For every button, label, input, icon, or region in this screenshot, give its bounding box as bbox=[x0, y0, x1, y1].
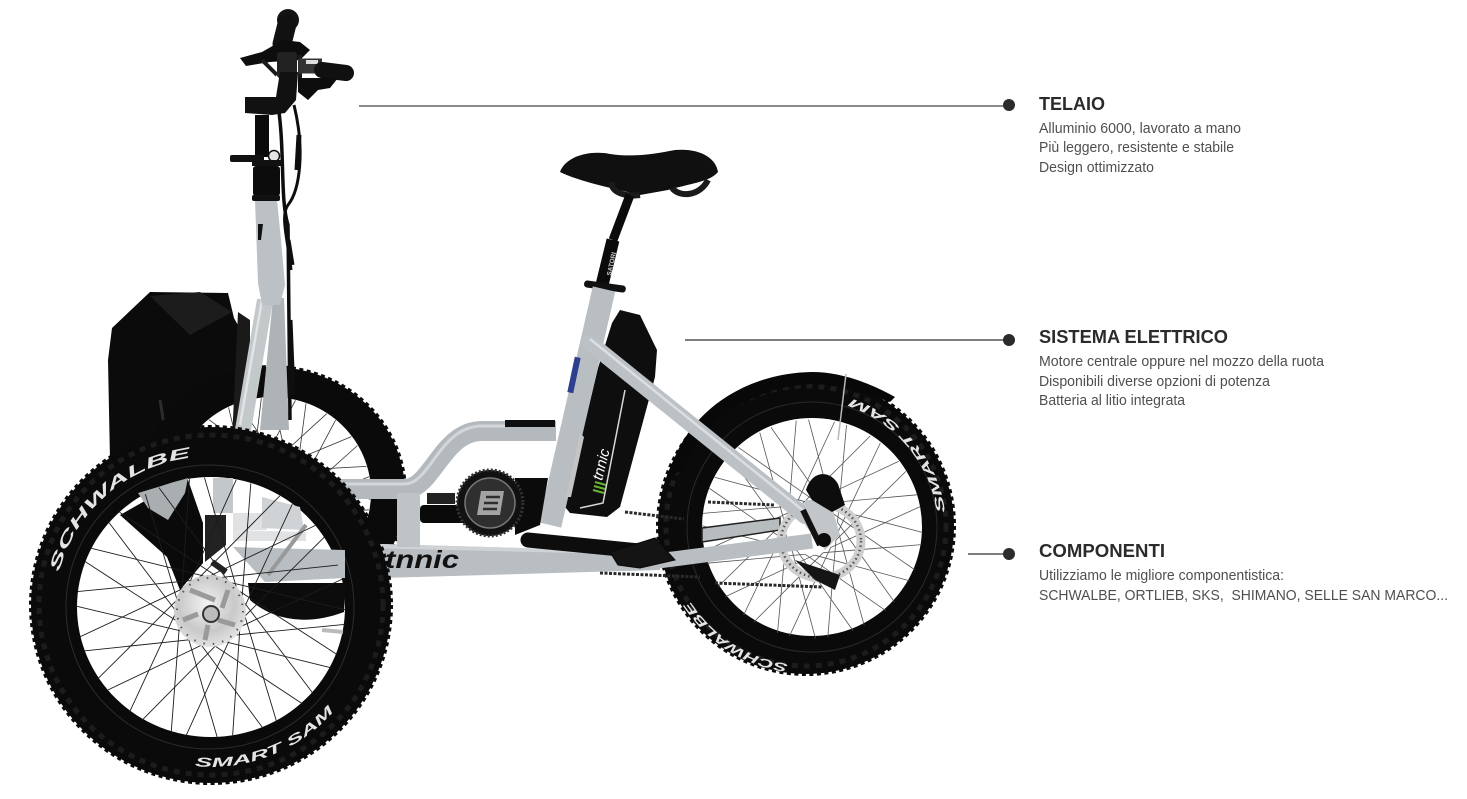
upper curved tube bbox=[328, 431, 556, 489]
front wheel bbox=[29, 425, 393, 785]
bottom beam with logo bbox=[240, 540, 660, 582]
fender strut bbox=[838, 374, 846, 440]
battery bbox=[565, 310, 657, 517]
callout: componenti bbox=[1039, 541, 1448, 604]
crank arm bbox=[528, 540, 640, 551]
callout: componenti: COMPONENTI bbox=[1039, 541, 1165, 561]
callout line: telaio bbox=[359, 99, 1015, 111]
bottom beam with logo: tnnic bbox=[385, 546, 459, 574]
saddle bbox=[560, 150, 718, 195]
frame sticker bbox=[567, 357, 581, 393]
front fork and steering column bbox=[240, 200, 289, 430]
back left wheel bbox=[125, 352, 419, 634]
callout: telaio: Più leggero, resistente e stabile bbox=[1039, 140, 1234, 156]
callout: telaio: TELAIO bbox=[1039, 94, 1105, 114]
tyre lettering rear: SCHWALBE bbox=[682, 602, 788, 672]
seat tube bbox=[550, 289, 604, 525]
rear right wheel bbox=[656, 384, 956, 676]
callout: sistema elettrico: Disponibili diverse opzioni di potenza bbox=[1039, 374, 1270, 390]
saddle rails bbox=[612, 180, 708, 195]
battery logo: tnnic bbox=[589, 447, 614, 482]
callout: sistema elettrico: Motore centrale oppure nel mozzo della ruota bbox=[1039, 354, 1324, 370]
motor logo bbox=[477, 491, 504, 515]
callout: sistema elettrico bbox=[1039, 327, 1324, 409]
callout: telaio bbox=[1039, 94, 1241, 176]
disc brake rotor bbox=[781, 504, 861, 590]
front hub bbox=[174, 562, 246, 647]
front wheel: SMART SAM bbox=[195, 704, 332, 768]
pedal bbox=[610, 538, 675, 568]
pannier rack bbox=[232, 312, 250, 440]
see-through behind front wheel: bag, fork, beam bbox=[120, 477, 346, 632]
rear hub and brake caliper bbox=[803, 474, 845, 550]
main frame bbox=[240, 289, 812, 582]
rear right wheel: SMART SAM bbox=[848, 399, 944, 512]
seat post: SATORI bbox=[606, 251, 618, 276]
callout line: componenti bbox=[968, 548, 1015, 560]
chain stay bbox=[658, 541, 812, 561]
callout: componenti: SCHWALBE, ORTLIEB, SKS, SHIMANO, SELLE SAN MARCO... bbox=[1039, 588, 1448, 604]
callout: telaio: Design ottimizzato bbox=[1039, 160, 1154, 176]
pannier bag bbox=[108, 292, 246, 460]
callout: telaio: Alluminio 6000, lavorato a mano bbox=[1039, 121, 1241, 137]
diagonal stay bbox=[590, 343, 805, 516]
rear fender bbox=[668, 372, 895, 478]
motor bbox=[420, 470, 548, 536]
chain bbox=[600, 502, 822, 587]
derailleur bar bbox=[702, 518, 780, 542]
frame connector bbox=[397, 493, 420, 547]
handlebar assembly bbox=[230, 9, 346, 201]
cables bbox=[278, 105, 300, 420]
callout: sistema elettrico: Batteria al litio integrata bbox=[1039, 393, 1185, 409]
silver battery strip bbox=[566, 433, 584, 497]
callout line: sistema elettrico bbox=[685, 334, 1015, 346]
callout: componenti: Utilizziamo le migliore componentistica: bbox=[1039, 568, 1284, 584]
tyre lettering front: SCHWALBE bbox=[51, 447, 190, 571]
seat post bbox=[584, 195, 630, 293]
callout: sistema elettrico: SISTEMA ELETTRICO bbox=[1039, 327, 1228, 347]
